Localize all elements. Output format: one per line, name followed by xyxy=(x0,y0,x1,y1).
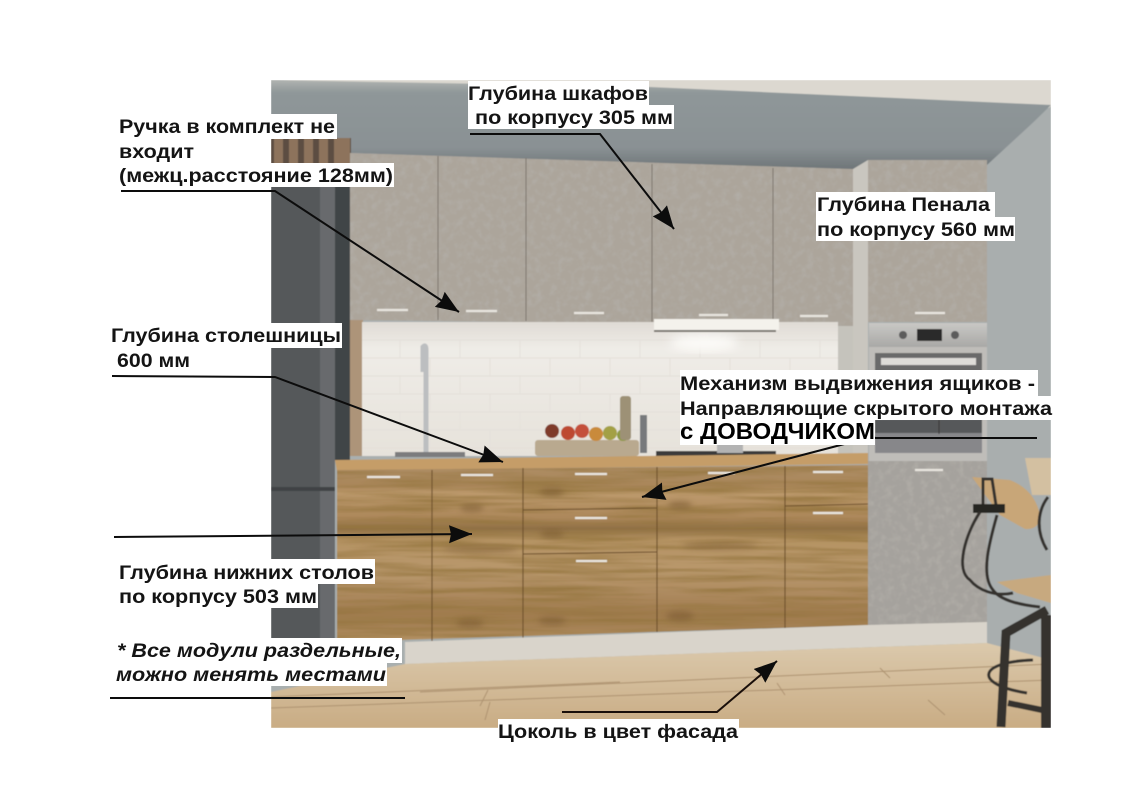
cooker hood xyxy=(654,319,779,352)
tap xyxy=(640,415,647,453)
ceiling xyxy=(271,80,1051,170)
leader arrow: base unit depth xyxy=(114,534,472,537)
annotation: tall unit depth xyxy=(816,192,1015,241)
annotation: modules note xyxy=(110,638,405,698)
label: handle: Ручка в комплект не xyxy=(119,116,335,138)
floor xyxy=(271,643,1051,728)
leader arrow: drawer mechanism xyxy=(642,436,875,497)
door gaps xyxy=(432,466,868,641)
label backgrounds: tall unit depth xyxy=(816,192,1015,241)
tall cabinet and lower grey door xyxy=(868,160,987,625)
chair xyxy=(963,458,1051,728)
label: modules note: * Все модули раздельные, xyxy=(117,640,401,662)
annotation: cabinet depth xyxy=(468,81,674,229)
label: handle: входит xyxy=(119,141,194,163)
fridge xyxy=(271,160,350,640)
door gaps xyxy=(438,156,773,325)
annotation: worktop depth xyxy=(111,323,503,462)
annotation: drawer mechanism xyxy=(642,370,1053,497)
label: cabinet depth: Глубина шкафов xyxy=(468,83,648,105)
wooden slats xyxy=(271,138,351,165)
leader arrow: handle xyxy=(121,191,459,312)
leader arrow: plinth xyxy=(562,661,777,712)
annotation: plinth xyxy=(498,661,777,744)
label: worktop depth: Глубина столешницы xyxy=(111,325,341,347)
right wall xyxy=(987,106,1051,166)
label: cabinet depth: по корпусу 305 мм xyxy=(475,107,673,129)
faucet xyxy=(423,346,426,455)
countertop xyxy=(335,453,868,471)
tall unit side panel xyxy=(853,160,868,460)
label backgrounds: handle xyxy=(119,114,394,187)
leader arrow: worktop depth xyxy=(112,376,503,462)
label backgrounds: base unit depth xyxy=(119,559,375,608)
label: base unit depth: Глубина нижних столов xyxy=(119,562,374,584)
tile backsplash xyxy=(362,322,838,456)
label: drawer mechanism: с ДОВОДЧИКОМ xyxy=(680,418,875,444)
wood knots xyxy=(442,488,758,627)
annotation: handle xyxy=(119,114,459,312)
label: drawer mechanism: Направляющие скрытого монтажа xyxy=(680,398,1053,420)
label background: plinth xyxy=(498,719,739,744)
label backgrounds: drawer mechanism xyxy=(680,370,1052,445)
label: base unit depth: по корпусу 503 мм xyxy=(119,586,317,608)
label: tall unit depth: по корпусу 560 мм xyxy=(817,219,1015,241)
underline: drawer mechanism xyxy=(875,437,1037,439)
left wood side xyxy=(350,320,363,456)
label: modules note: можно менять местами xyxy=(116,664,386,686)
leader arrow: cabinet depth xyxy=(470,134,674,229)
label: handle: (межц.расстояние 128мм) xyxy=(119,165,393,187)
plinth xyxy=(405,622,987,664)
label: worktop depth: 600 мм xyxy=(117,350,190,372)
label backgrounds: worktop depth xyxy=(111,323,342,372)
sink and hob xyxy=(395,444,776,457)
upper cabinets xyxy=(350,150,854,328)
label backgrounds: cabinet depth xyxy=(468,81,674,129)
light top band xyxy=(271,80,1051,108)
underline: modules note xyxy=(110,697,405,699)
infographic canvas xyxy=(110,80,1052,742)
base cabinets xyxy=(337,463,869,643)
cabinet handles xyxy=(367,310,945,561)
label backgrounds: modules note xyxy=(116,638,402,686)
kitchen photo xyxy=(271,80,1051,728)
oven xyxy=(869,323,987,461)
label: plinth: Цоколь в цвет фасада xyxy=(498,721,739,743)
annotation: base unit depth xyxy=(114,534,472,608)
fruit bowl xyxy=(535,424,639,456)
bottle xyxy=(620,396,631,440)
label: tall unit depth: Глубина Пенала xyxy=(817,194,991,216)
label: drawer mechanism: Механизм выдвижения ящиков - xyxy=(680,373,1035,395)
